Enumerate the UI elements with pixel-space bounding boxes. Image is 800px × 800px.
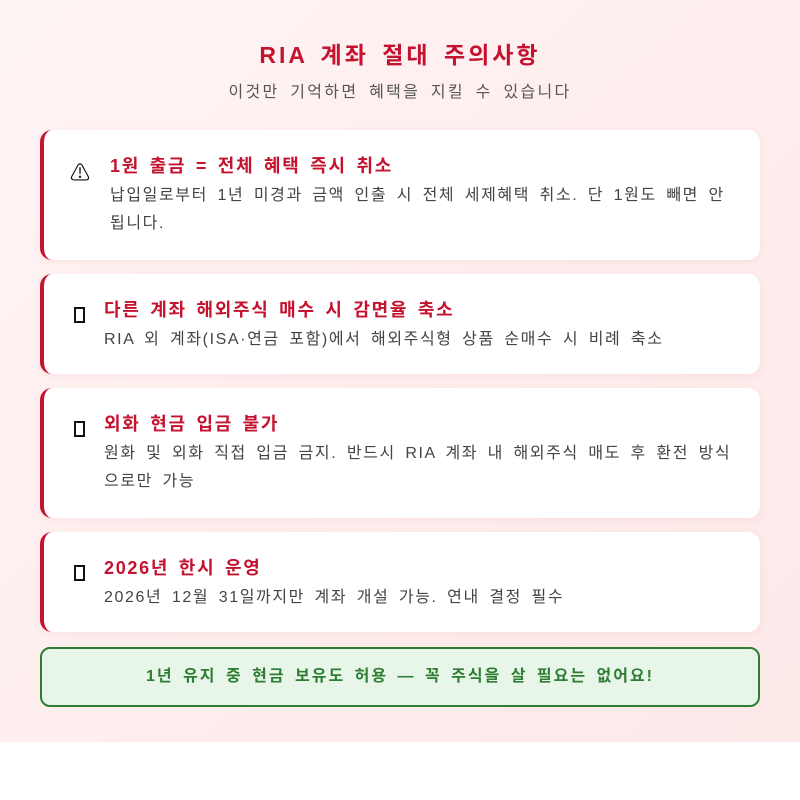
card body 1: 납입일로부터 1년 미경과 금액 인출 시 전체 세제혜택 취소. 단 1원도 빼면 안 bbox=[110, 187, 725, 204]
card body 1 bbox=[110, 186, 725, 232]
panel: card 2 bbox=[40, 274, 760, 374]
callout: green note bbox=[40, 647, 760, 707]
panel: card 3 bbox=[40, 388, 760, 518]
card body 4: 2026년 12월 31일까지만 계좌 개설 가능. 연내 결정 필수 bbox=[104, 589, 564, 606]
panel: card 1 bbox=[40, 130, 760, 260]
icon: box bbox=[74, 421, 85, 437]
card body 2: RIA 외 계좌(ISA·연금 포함)에서 해외주식형 상품 순매수 시 비례 축소 bbox=[104, 331, 664, 348]
card title 2: 다른 계좌 해외주식 매수 시 감면율 축소 bbox=[104, 300, 454, 320]
card title 1: 1원 출금 = 전체 혜택 즉시 취소 bbox=[110, 156, 393, 176]
card body 3: 으로만 가능 bbox=[104, 473, 195, 490]
icon: box bbox=[74, 307, 85, 323]
card body 3 bbox=[104, 444, 731, 490]
subtitle: 이것만 기억하면 혜택을 지킬 수 있습니다 bbox=[228, 84, 572, 101]
panel: card 4 bbox=[40, 532, 760, 632]
card body 3: 원화 및 외화 직접 입금 금지. 반드시 RIA 계좌 내 해외주식 매도 후 환전 방식 bbox=[104, 445, 731, 462]
icon: box bbox=[74, 565, 85, 581]
title: RIA 계좌 절대 주의사항 bbox=[259, 42, 541, 68]
callout: green note: 1년 유지 중 현금 보유도 허용 — 꼭 주식을 살 필요는 없어요! bbox=[146, 668, 654, 685]
card title 4: 2026년 한시 운영 bbox=[104, 558, 262, 578]
card title 3: 외화 현금 입금 불가 bbox=[104, 414, 279, 434]
icon: warning: ⚠ bbox=[70, 163, 90, 185]
card body 1: 됩니다. bbox=[110, 215, 165, 232]
